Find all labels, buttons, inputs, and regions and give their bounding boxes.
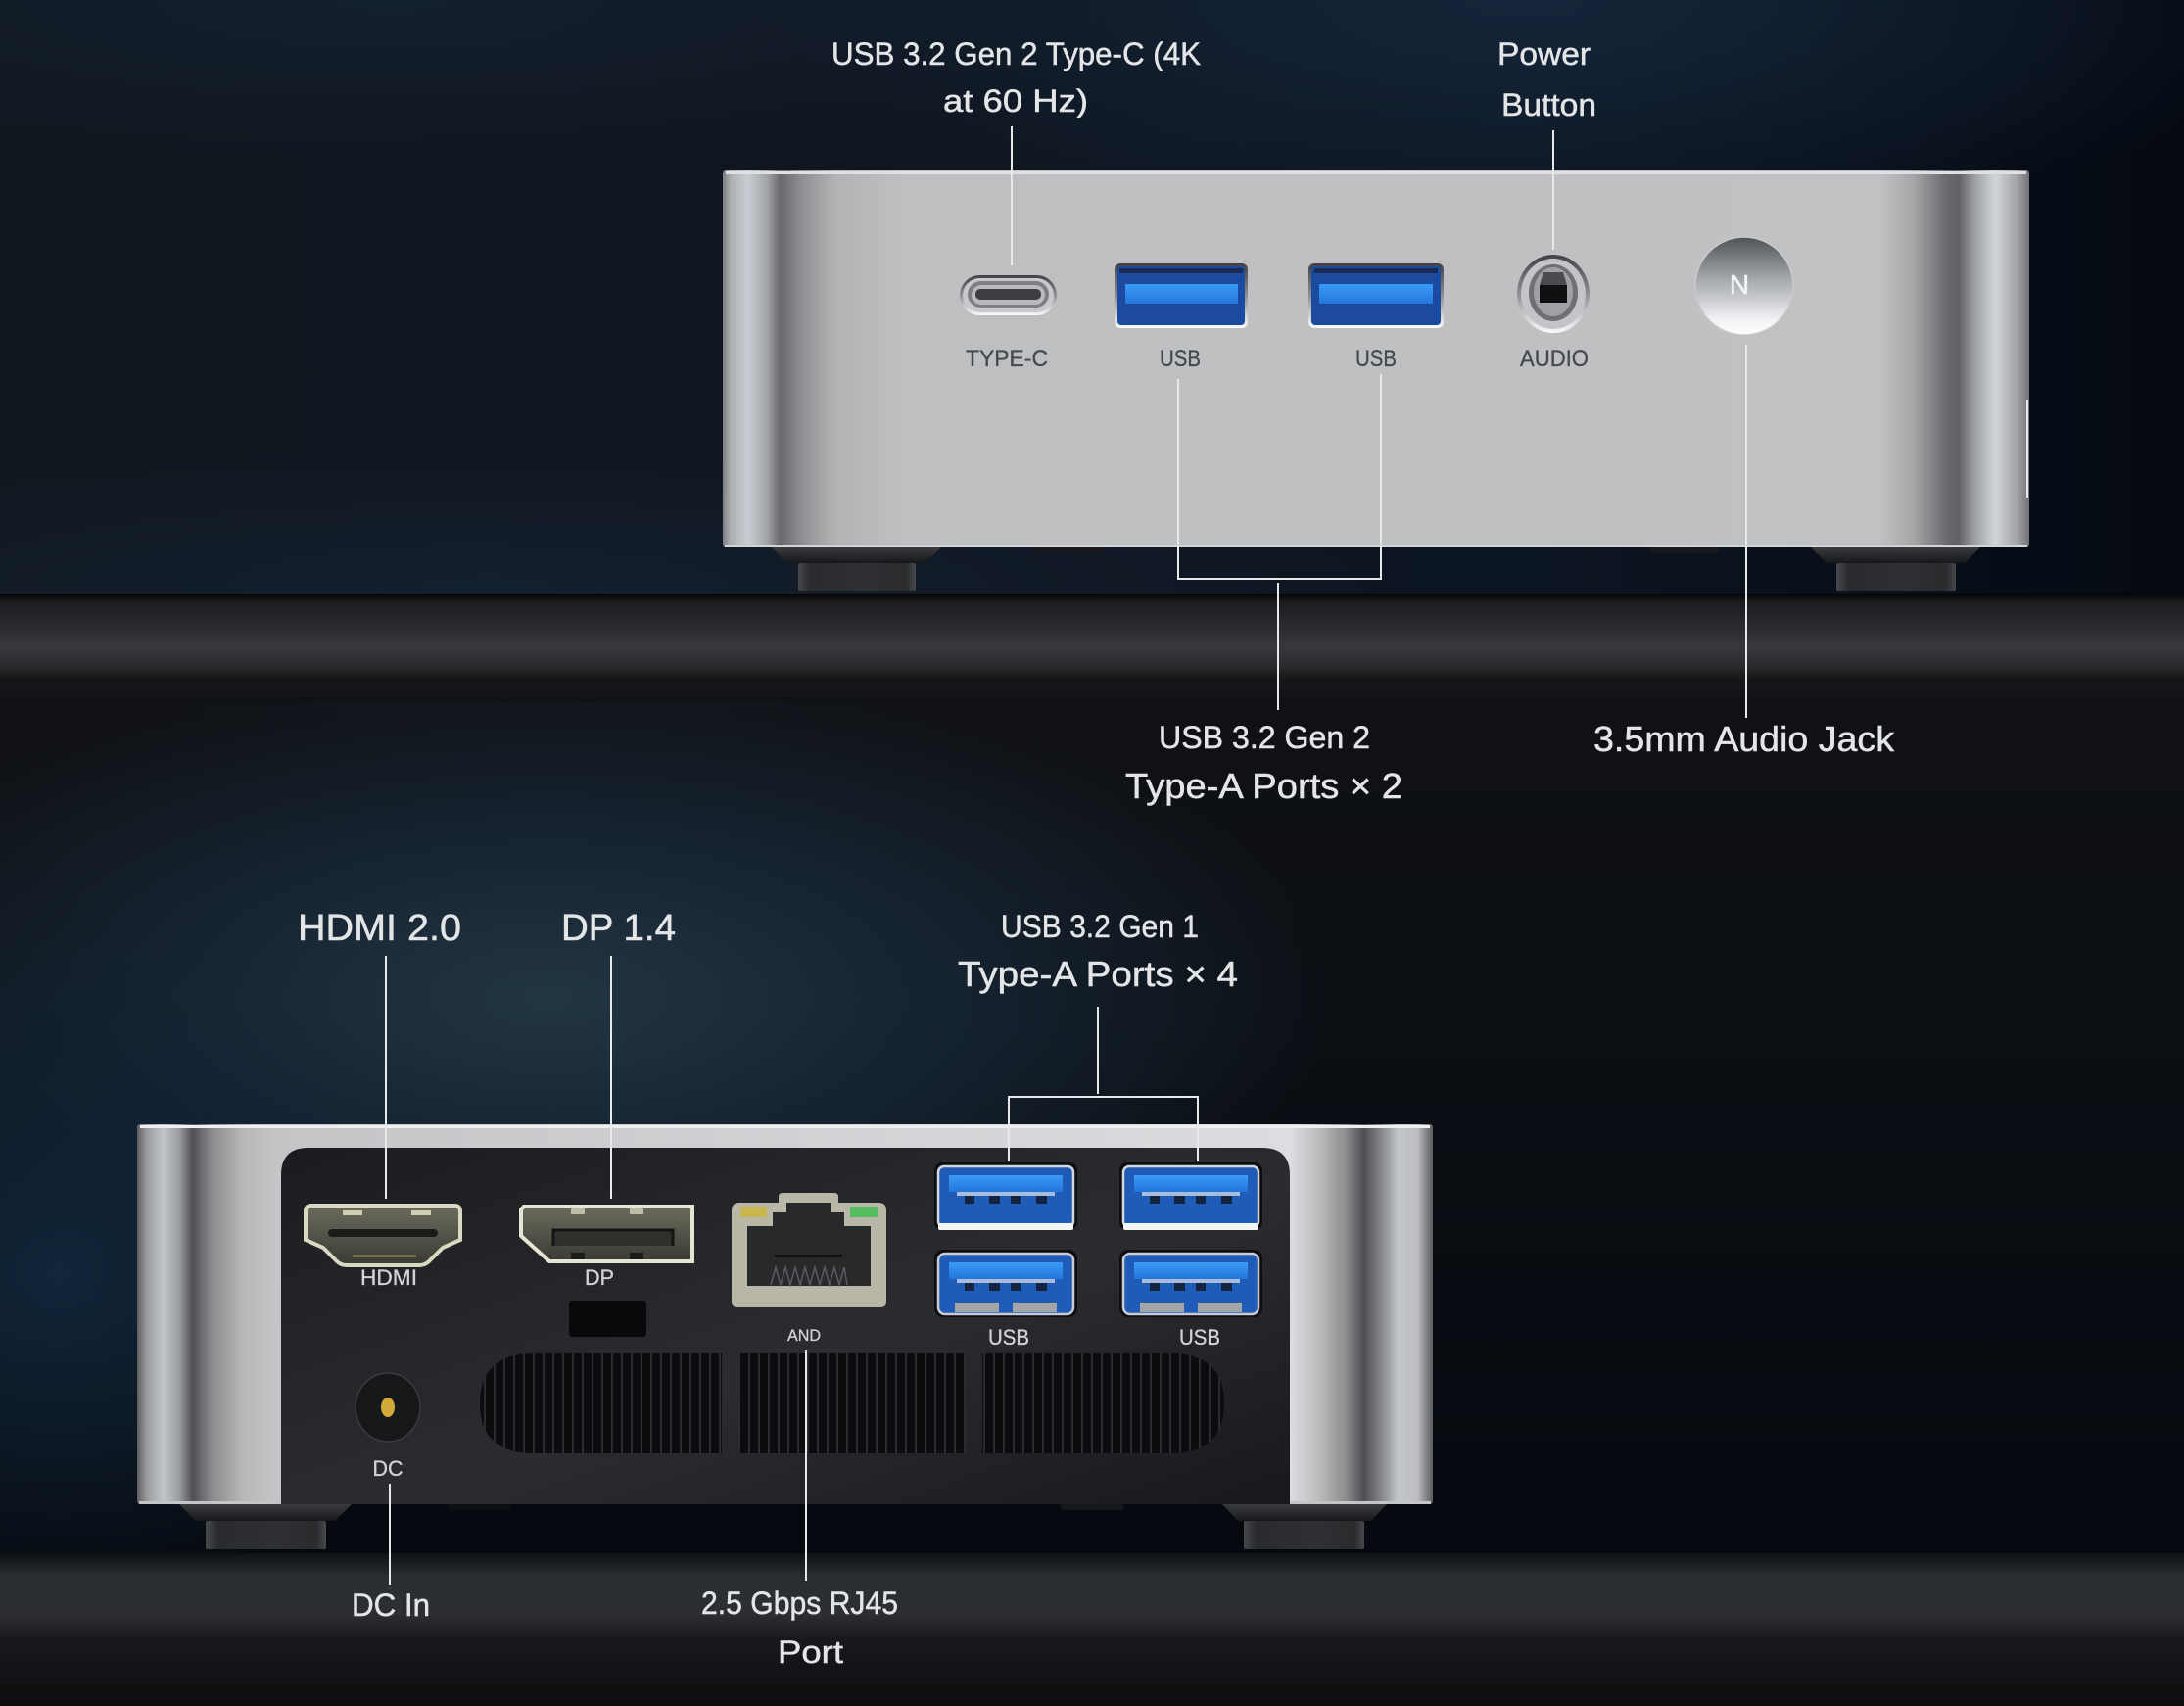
callout: USB Type-A x4: USB 3.2 Gen 1 — [1001, 909, 1199, 944]
port: USB-A lower right — [1119, 1250, 1262, 1317]
metal housing — [137, 1124, 1433, 1504]
callout: power button: Power — [1497, 36, 1591, 71]
rubber feet — [771, 546, 1981, 591]
port: USB-A upper right — [1119, 1162, 1262, 1230]
callout: RJ45: 2.5 Gbps RJ45 — [701, 1586, 898, 1621]
label: AUDIO: AUDIO — [1520, 346, 1589, 372]
port: HDMI — [306, 1206, 460, 1265]
port: USB-A lower left — [934, 1250, 1077, 1317]
port: USB-C — [960, 275, 1057, 315]
button: power — [1695, 237, 1793, 335]
label: DC: DC — [372, 1456, 404, 1481]
label: USB right: USB — [1355, 346, 1397, 372]
shelf: top — [0, 594, 2184, 702]
callout lines — [386, 126, 1746, 1585]
callout: USB-C — [831, 36, 1201, 118]
button: power: N — [1730, 269, 1749, 300]
port: USB-A 1 — [1115, 263, 1248, 328]
black rear panel — [281, 1148, 1290, 1504]
label: HDMI: HDMI — [360, 1265, 417, 1290]
port: DisplayPort — [521, 1207, 692, 1261]
callout: USB Type-A x2: USB 3.2 Gen 2 — [1159, 720, 1370, 755]
vents — [480, 1353, 1224, 1453]
callout: DC In: DC In — [352, 1588, 430, 1623]
callout: power button — [1497, 36, 1596, 122]
callout: USB-C: USB 3.2 Gen 2 Type-C (4K — [831, 36, 1201, 71]
latch slot — [569, 1301, 646, 1337]
callout: RJ45: Port — [778, 1635, 843, 1670]
port: DC jack — [356, 1373, 420, 1442]
metal front face — [723, 170, 2029, 547]
label: TYPE-C: TYPE-C — [966, 346, 1048, 372]
callout: RJ45 — [701, 1586, 898, 1670]
shelf: bottom — [0, 1553, 2184, 1706]
label: DP: DP — [585, 1265, 614, 1290]
callout: power button: Button — [1501, 87, 1596, 122]
port: USB-A upper left — [934, 1162, 1077, 1230]
callout: HDMI 2.0: HDMI 2.0 — [298, 908, 461, 949]
callout: USB-C: at 60 Hz) — [943, 83, 1088, 118]
callout: DP 1.4: DP 1.4 — [561, 908, 676, 949]
callout: USB Type-A x4 — [958, 909, 1238, 994]
label: USB rear left: USB — [988, 1325, 1029, 1350]
port: audio jack — [1517, 255, 1590, 333]
label: USB rear right: USB — [1179, 1325, 1220, 1350]
device: rear view — [137, 1124, 1433, 1549]
port: RJ45 — [732, 1193, 886, 1307]
callout: audio jack: 3.5mm Audio Jack — [1593, 719, 1895, 759]
callout: USB Type-A x2 — [1125, 720, 1402, 806]
rubber feet — [178, 1503, 1388, 1549]
device: front view — [723, 170, 2029, 591]
label: USB left: USB — [1160, 346, 1201, 372]
callout: USB Type-A x4: Type-A Ports × 4 — [958, 954, 1238, 994]
callout: USB Type-A x2: Type-A Ports × 2 — [1125, 766, 1402, 806]
label: AND: AND — [787, 1326, 821, 1345]
port: USB-A 2 — [1308, 263, 1444, 328]
